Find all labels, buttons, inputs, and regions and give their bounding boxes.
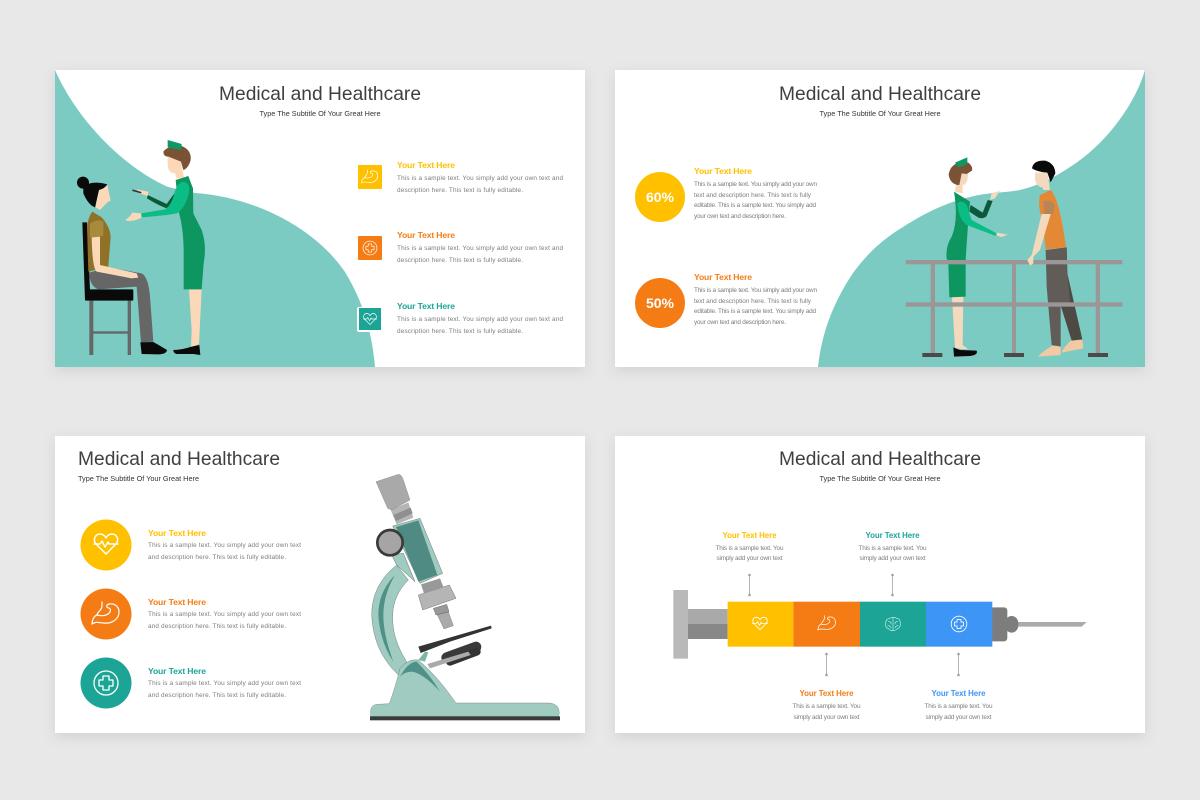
callout 1 (716, 531, 784, 562)
text block 60%: text and description here. This text is fully (694, 192, 812, 199)
icon: medical cross (951, 616, 967, 632)
item 1: icon and text: This is a sample text. You simply add your own text and (397, 175, 563, 182)
teal background shape (818, 70, 1145, 367)
stat 60%: 60% (646, 189, 675, 205)
illustration: seated patient and nurse (77, 140, 205, 355)
text block 50%: This is a sample text. You simply add your own (694, 287, 817, 294)
subtitle: Type The Subtitle Of Your Great Here (820, 109, 940, 118)
callout 4: simply add your own text (926, 714, 992, 721)
text block 60%: Your Text Here (694, 166, 752, 176)
callout 3 (792, 689, 861, 721)
callout 3: This is a sample text. You (792, 703, 861, 710)
panel: nurse with seated patient (55, 70, 585, 367)
item 1: heart (80, 520, 301, 570)
stat 50%: 50% (646, 295, 675, 311)
item 1: heart: This is a sample text. You simply add your own text (148, 542, 301, 549)
item 3: medical cross (80, 658, 301, 708)
connector lines (748, 574, 960, 676)
item 3: icon and text: This is a sample text. You simply add your own text and (397, 316, 563, 323)
heading: Medical and Healthcare (779, 449, 981, 470)
panel: syringe (615, 436, 1145, 733)
panel: microscope (55, 436, 585, 733)
heading: Medical and Healthcare (219, 84, 421, 105)
icon: brain (886, 617, 900, 631)
text block 50%: editable. This is a sample text. You simply add (694, 308, 816, 315)
text block 60%: This is a sample text. You simply add your own (694, 181, 817, 188)
item 3: icon and text: Your Text Here (397, 301, 455, 311)
heading: Medical and Healthcare (78, 449, 280, 470)
icon: stomach (818, 616, 835, 630)
item 1: heart: and description here. This text is fully editable. (148, 554, 286, 561)
callout 2: Your Text Here (866, 531, 920, 540)
item 2: stomach: Your Text Here (148, 597, 206, 607)
text block 50%: your own text and description here. (694, 319, 786, 326)
callout 1: This is a sample text. You (716, 545, 784, 552)
item 2: icon and text (358, 230, 563, 264)
item 2: icon and text: This is a sample text. You simply add your own text and (397, 245, 563, 252)
icon: heart (753, 617, 767, 630)
text block 60%: your own text and description here. (694, 213, 786, 220)
callout 4 (924, 689, 993, 721)
item 1: icon and text (358, 160, 563, 194)
callout 2: This is a sample text. You (858, 545, 927, 552)
stat 60% (635, 172, 685, 222)
illustration: nurse, patient and parallel bars (906, 157, 1122, 357)
item 3: medical cross: Your Text Here (148, 666, 206, 676)
item 2: stomach: and description here. This text is fully editable. (148, 623, 286, 630)
item 1: icon and text: Your Text Here (397, 160, 455, 170)
callout 3: Your Text Here (800, 689, 854, 698)
callout 3: simply add your own text (794, 714, 860, 721)
teal background shape (55, 70, 375, 367)
text block 60% (694, 166, 817, 220)
item 2: stomach (80, 588, 301, 640)
text block 60%: editable. This is a sample text. You simply add (694, 202, 816, 209)
text block 50% (694, 272, 817, 326)
item 1: icon and text: description here. This text is fully editable. (397, 187, 523, 194)
callout 4: Your Text Here (932, 689, 986, 698)
callout 1: Your Text Here (722, 531, 777, 540)
text block 50%: text and description here. This text is fully (694, 298, 812, 305)
subtitle: Type The Subtitle Of Your Great Here (820, 474, 940, 483)
item 1: heart: Your Text Here (148, 528, 206, 538)
text block 50%: Your Text Here (694, 272, 752, 282)
item 2: stomach: This is a sample text. You simply add your own text (148, 611, 301, 618)
item 3: medical cross: and description here. This text is fully editable. (148, 692, 286, 699)
callout 2 (858, 531, 927, 562)
item 2: icon and text: description here. This text is fully editable. (397, 257, 523, 264)
panel: rehabilitation with percentages (615, 70, 1145, 367)
subtitle: Type The Subtitle Of Your Great Here (260, 109, 380, 118)
item 3: icon and text: description here. This text is fully editable. (397, 328, 523, 335)
item 3: medical cross: This is a sample text. You simply add your own text (148, 680, 301, 687)
illustration: microscope (370, 474, 560, 720)
heading: Medical and Healthcare (779, 84, 981, 105)
item 3: icon and text (357, 301, 563, 335)
callout 1: simply add your own text (716, 555, 783, 562)
stat 50% (635, 278, 685, 328)
syringe (673, 590, 1087, 659)
subtitle: Type The Subtitle Of Your Great Here (78, 474, 199, 483)
callout 2: simply add your own text (860, 555, 926, 562)
callout 4: This is a sample text. You (924, 703, 993, 710)
item 2: icon and text: Your Text Here (397, 230, 455, 240)
